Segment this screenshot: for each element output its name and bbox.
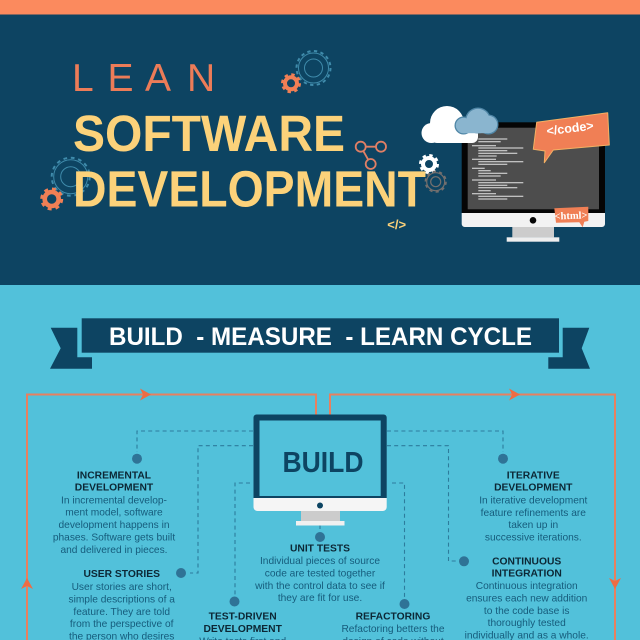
monitor chin [254,498,387,511]
monitor screen [468,128,599,209]
illustration: desktop computer [462,122,605,242]
title word: lean: LEAN [72,57,215,100]
text block: user stories: simple descriptions of a [68,594,175,606]
callout text: code: </code> [546,119,594,138]
text block: unit tests: UNIT TESTS [290,543,350,554]
text block: unit tests: Individual pieces of source [260,556,380,567]
monitor base [507,237,559,242]
text block: iterative development: In iterative development [479,496,588,506]
text block: incremental development: ment model, software [65,508,163,519]
text block: incremental development: development happens in [58,520,170,531]
text block: user stories: from the perspective of [70,619,174,630]
icon: orange gear top [282,75,300,92]
cycle panel background [0,285,640,640]
icon: blue cloud [454,108,498,134]
title word: software: SOFTWARE [73,105,345,162]
ribbon body [82,318,559,353]
text block: unit tests: code are tested together [265,568,376,580]
icon: white gear [420,155,438,173]
icon: outline gear top [296,51,330,85]
camera dot [317,502,323,508]
monitor frame [462,122,605,213]
monitor label: BUILD [282,447,364,479]
text block: unit tests [254,543,385,604]
monitor camera dot [530,217,536,224]
icon: white cloud [422,106,478,143]
text block: continuous integration: INTEGRATION [492,568,562,580]
text block: refactoring [341,612,445,640]
text block: refactoring: Refactoring betters the [341,624,445,635]
icon: grey outline gear [425,171,446,192]
screen area [260,420,381,496]
text block: continuous integration: Continuous integration [476,581,578,592]
top orange strip [0,0,640,14]
text block: incremental development: In incremental develop- [61,495,167,506]
text block: iterative development: DEVELOPMENT [494,483,573,494]
code lines on screen [472,139,523,199]
text block: user stories: User stories are short, [72,582,172,593]
text block: iterative development: feature refinements are [481,508,586,519]
text block: user stories: USER STORIES [83,569,160,580]
title word: development: DEVELOPMENT [73,160,426,218]
monitor stand [512,227,554,237]
arrowhead right [509,388,520,400]
cycle arrow: top right loop [330,388,621,640]
text block: incremental development: INCREMENTAL [77,470,151,482]
text block: continuous integration: to the code base is [484,606,569,617]
arrowhead up [21,578,33,589]
text block: continuous integration: thoroughly tested [488,618,566,629]
text block: incremental development [53,470,175,556]
callout: code speech bubble [533,113,609,163]
banner heading: BUILD - MEASURE - LEARN CYCLE [109,323,532,351]
arrowhead right [140,388,151,400]
stand [301,511,340,521]
screen frame [254,414,387,498]
text block: user stories: feature. They are told [73,607,170,618]
section banner [50,318,590,369]
text block: iterative development [479,470,588,544]
icon: orange gear left [42,189,62,209]
text block: incremental development: DEVELOPMENT [75,483,154,494]
text block: refactoring: REFACTORING [356,612,430,622]
dashed connectors [137,431,503,598]
text block: iterative development: ITERATIVE [507,470,560,482]
ribbon tail left [50,328,92,369]
text block: user stories [68,569,175,640]
text block: incremental development: phases. Software gets built [53,532,175,544]
text block: unit tests: they are fit for use. [278,593,362,604]
title [72,57,426,218]
icon: network nodes [356,142,386,169]
arrowhead down [609,578,621,589]
ribbon tail right [548,328,590,369]
text block: unit tests: with the control data to see if [254,581,385,592]
cycle arrow: top left loop [21,388,316,640]
text block: test-driven development [199,612,287,640]
hero panel background [0,14,640,285]
base [296,521,344,526]
text block: iterative development: taken up in [508,520,558,531]
text block: incremental development: and delivered in pieces. [60,545,168,556]
callout text: html: <html> [554,210,588,223]
text block: test-driven development: TEST-DRIVEN [209,612,277,622]
connector dots [132,454,508,609]
icon: code tag symbol: </> [387,217,407,232]
callout: html speech bubble [554,207,588,227]
text block: test-driven development: DEVELOPMENT [204,624,283,635]
text block: continuous integration: CONTINUOUS [492,556,561,567]
text block: iterative development: successive iterations. [485,532,582,544]
text block: continuous integration [465,556,589,640]
monitor chin [462,213,605,227]
text block: continuous integration: ensures each new addition [466,594,587,604]
icon: outline gear left [52,158,90,196]
build monitor [254,414,387,526]
